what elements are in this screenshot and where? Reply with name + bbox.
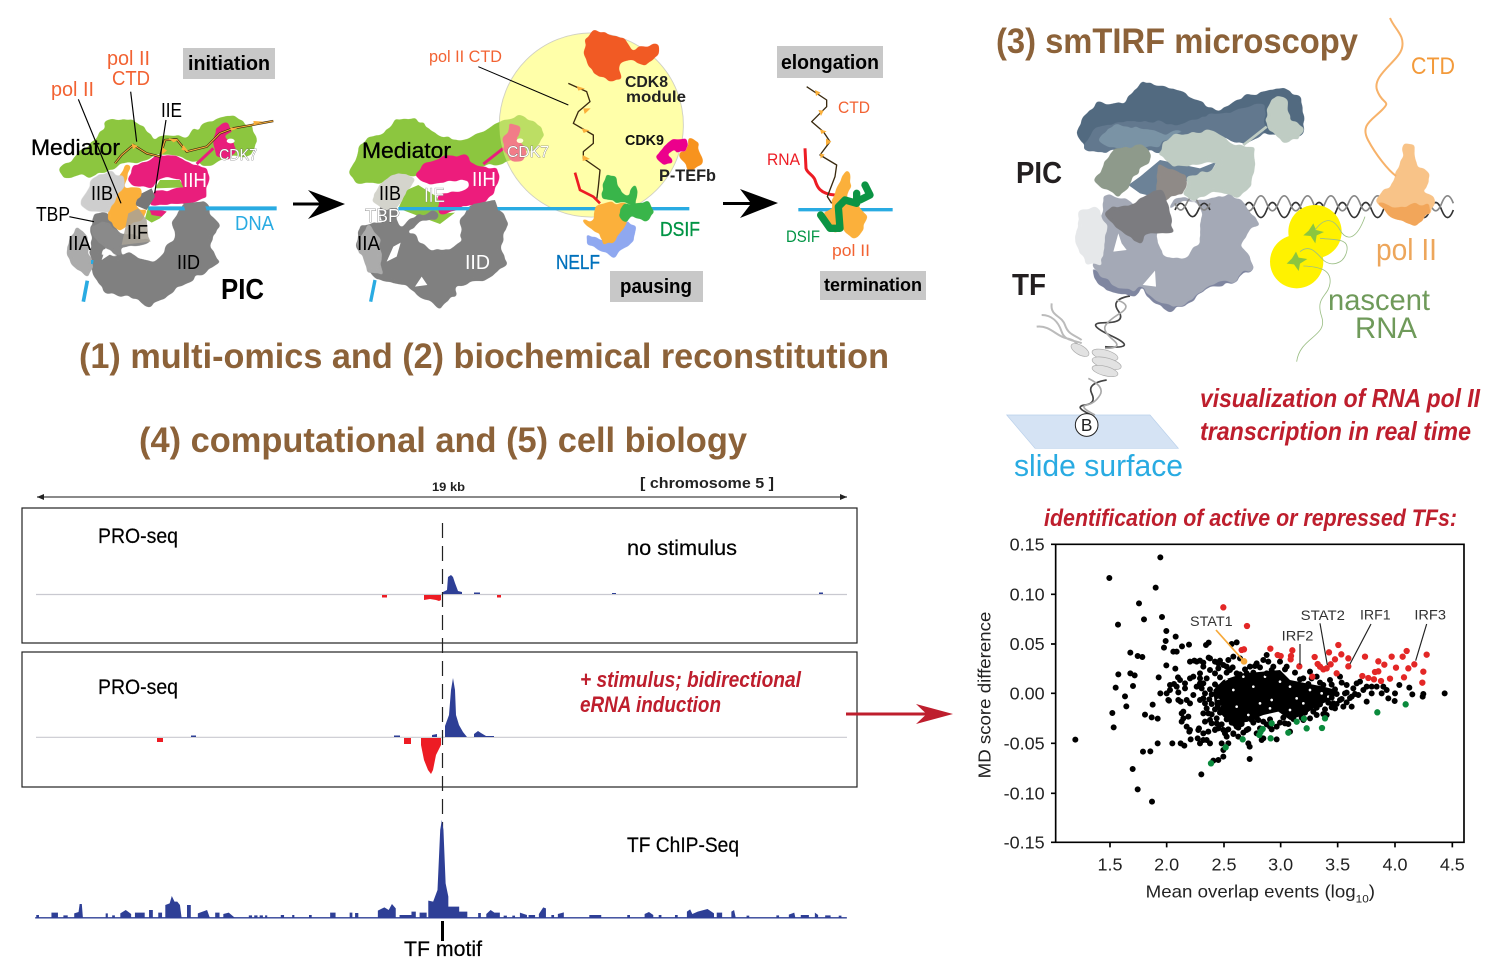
labels: IIF (127, 222, 148, 244)
panel: smTIRF illustration (1007, 18, 1481, 483)
x axis title: Mean overlap events (log (1146, 882, 1348, 902)
panel: genome browser tracks (22, 475, 857, 961)
x axis tick labels: 2.0 (1154, 855, 1179, 875)
labels: IIB (91, 183, 113, 205)
heading: termination: termination (824, 275, 922, 295)
track: PRO-seq with stimulus (22, 652, 857, 787)
PIC molecular drawing (59, 92, 277, 308)
leader line (478, 67, 568, 105)
heading: initiation: initiation (188, 53, 270, 75)
x axis title: ) (1369, 882, 1375, 902)
y axis tick labels: 0.10 (1010, 585, 1045, 605)
title: computational and cell biology: (4) computational and (5) cell biology (139, 421, 748, 460)
labels: CDK9 (625, 132, 664, 149)
heading: elongation (777, 46, 883, 78)
panel: pausing diagram (348, 30, 716, 308)
labels: DSIF (660, 219, 700, 241)
labels: CTD (838, 98, 870, 117)
callout: stimulus (580, 667, 802, 717)
labels: DSIF (786, 227, 820, 246)
panel: elongation and termination diagram (767, 46, 926, 300)
y axis tick labels: 0.15 (1010, 535, 1045, 555)
labels: P-TEFb (659, 166, 716, 185)
labels: IID (465, 252, 490, 274)
labels: IIA (68, 233, 92, 255)
x axis tick labels: 1.5 (1097, 855, 1123, 875)
TF motif marker: TF motif (404, 938, 482, 961)
histone-like complex (1037, 303, 1123, 379)
track: PRO-seq no stimulus: PRO-seq (98, 525, 178, 548)
dashed motif line (442, 523, 444, 905)
labels: IIB (379, 183, 401, 205)
labels: nascent (1328, 284, 1431, 317)
labels: IIH (472, 169, 496, 191)
panel: initiation PIC diagram (31, 48, 277, 308)
labels: IIA (357, 233, 381, 255)
y axis title: MD score difference (975, 612, 995, 778)
x axis tick labels: 4.0 (1382, 855, 1408, 875)
y axis tick labels: 0.05 (1010, 634, 1045, 654)
x axis title: 10 (1356, 893, 1369, 905)
labels: IID (177, 252, 200, 274)
heading: pausing: pausing (620, 276, 692, 298)
arrow: pausing to elongation (723, 189, 778, 218)
DNA helix (1243, 196, 1453, 217)
y axis tick labels: -0.15 (1004, 833, 1045, 853)
labels: CTD (112, 68, 150, 90)
labels: CTD (1411, 53, 1455, 80)
track: TF ChIP-Seq (35, 820, 847, 918)
labels (1012, 53, 1455, 483)
nascent RNA strands (1297, 217, 1365, 362)
TF labels: IRF3 (1414, 606, 1446, 622)
labels (767, 98, 870, 260)
TF labels: IRF2 (1282, 628, 1314, 644)
dense black data cloud (1075, 557, 1445, 802)
DNA strands to slide (1080, 296, 1130, 415)
heading: termination (820, 271, 926, 300)
title: smTIRF microscopy: (3) smTIRF microscopy (996, 22, 1358, 61)
labels: TF (1012, 267, 1046, 302)
labels: RNA (767, 150, 801, 169)
region scale bar: 19 kb (432, 480, 465, 494)
pausing molecular drawing (348, 30, 703, 308)
arrow: tracks to scatter plot (846, 704, 953, 724)
heading: initiation (183, 48, 275, 79)
smTIRF complex drawing (1007, 80, 1453, 448)
labels: pol II (832, 241, 870, 260)
track: PRO-seq no stimulus (22, 508, 857, 643)
labels: DNA (235, 213, 275, 235)
leader lines (69, 92, 166, 222)
y axis tick labels: 0.00 (1010, 684, 1045, 704)
x axis tick labels: 3.5 (1325, 855, 1350, 875)
labels: pol II (51, 79, 94, 101)
labels: module (626, 89, 686, 106)
region scale bar: [ chromosome 5 ] (640, 475, 774, 492)
labels: IIE (424, 185, 445, 207)
labels: IIH (183, 170, 207, 192)
TF motif marker (404, 921, 482, 961)
axes frame (1051, 544, 1464, 847)
heading: identification of TFs: identification of active or repressed TFs: (1044, 505, 1457, 532)
labels: CDK7 (219, 147, 257, 164)
x axis tick labels (1097, 855, 1465, 875)
labels: Mediator (31, 135, 120, 160)
labels: TBP (365, 206, 400, 226)
elongation molecular drawing (798, 87, 893, 238)
TF labels: IRF1 (1360, 606, 1391, 622)
labels: PIC (1016, 155, 1062, 190)
labels: CDK8 (625, 74, 668, 91)
CTD strand (1365, 18, 1403, 176)
TF labels: STAT1 (1190, 613, 1233, 629)
heading: pausing (610, 271, 703, 302)
y axis tick labels: -0.10 (1004, 784, 1045, 804)
labels: IIE (161, 100, 182, 122)
heading: elongation: elongation (781, 52, 879, 74)
track: PRO-seq no stimulus: no stimulus (627, 537, 737, 560)
x axis tick labels: 3.0 (1268, 855, 1293, 875)
TF labels: STAT2 (1301, 607, 1345, 623)
scatter chart: MD score difference (975, 535, 1465, 905)
slide surface (1007, 415, 1178, 448)
label: biotin: B (1081, 415, 1092, 435)
annotation arrows (1300, 623, 1427, 665)
y axis tick labels (1004, 535, 1045, 853)
track: PRO-seq with stimulus: PRO-seq (98, 676, 178, 699)
TF labels (1190, 606, 1446, 644)
fluorescent spots (1270, 205, 1342, 288)
labels: PIC (221, 274, 264, 306)
callout: visualization of transcription (1200, 383, 1481, 446)
STAT1 highlight (1216, 630, 1247, 665)
callout: visualization of transcription: transcription in real time (1200, 416, 1471, 446)
label: biotin (1075, 414, 1098, 436)
x axis tick labels: 2.5 (1211, 855, 1237, 875)
pol II (1377, 143, 1435, 227)
x axis tick labels: 4.5 (1440, 855, 1465, 875)
callout: stimulus: eRNA induction (580, 692, 721, 717)
labels: pol II (1376, 232, 1437, 267)
labels: pol II (107, 48, 150, 70)
callout: stimulus: + stimulus; bidirectional (580, 667, 802, 692)
labels: slide surface (1014, 448, 1183, 483)
labels: TBP (36, 204, 70, 226)
repressed TFs: green points (1211, 704, 1406, 763)
labels (357, 47, 716, 274)
arrow: initiation to pausing (293, 190, 345, 219)
region scale bar (37, 475, 847, 500)
activated TFs: red points (1223, 607, 1427, 683)
track: TF ChIP-Seq: TF ChIP-Seq (627, 834, 739, 857)
labels: RNA (1355, 312, 1417, 345)
labels: NELF (556, 252, 600, 274)
y axis tick labels: -0.05 (1004, 734, 1045, 754)
labels: CDK7 (507, 144, 549, 161)
labels: Mediator (362, 138, 451, 163)
labels (31, 48, 275, 306)
title: multi-omics and biochemical reconstitution: (1) multi-omics and (2) biochemical reconstitution (79, 337, 889, 376)
labels: pol II CTD (429, 47, 502, 66)
